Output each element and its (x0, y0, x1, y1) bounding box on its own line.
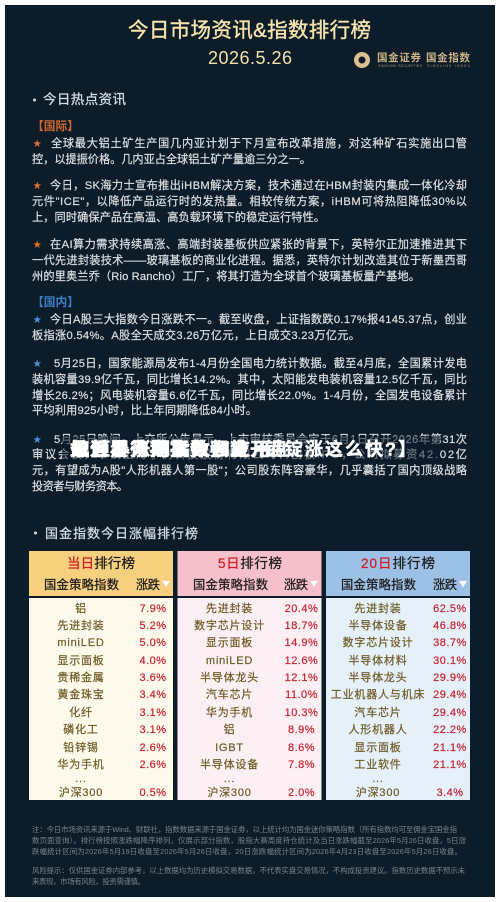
news text: domestic (32, 312, 468, 493)
news text: domestic: ★ (33, 434, 42, 444)
caption overlay band (62, 436, 440, 462)
returns: 12.6% (285, 655, 318, 667)
returns: 14.9% (285, 637, 318, 649)
column headers: 涨跌 (136, 577, 160, 592)
news text: international: 控，以提振价格。几内亚占全球铝土矿产量逾三分之一。 (32, 152, 311, 166)
news text: international: 在AI算力需求持续高涨、高端封装基板供应紧张的背景下，英特尔正加速推进其下 (50, 237, 467, 251)
returns: 0.5% (139, 787, 167, 799)
returns (139, 603, 167, 799)
returns: 29.4% (433, 689, 467, 701)
news text: domestic: 板指涨0.54%。A股全天成交3.26万亿元，上日成交3.23万亿元。 (32, 328, 360, 342)
footnote and risk disclosure: 数页面查询）。排行榜按照涨跌幅降序排列，仅展示部分指数，股指大赛周度持仓统计及当日涨跌幅截至2026年5月26日收盘，5日涨 (32, 836, 467, 845)
index names: 显示面板 (354, 740, 402, 754)
news text: international: ★ (33, 240, 42, 250)
overlapping video captions: 如何看待期指数强势开盘 (70, 438, 290, 460)
news text: domestic: 5月25日晚间，上交所公告显示，上市审核委员会定于6月1日召开2026年第31次 (54, 432, 467, 446)
footnote and risk disclosure: 跌幅统计区间为2026年5月19日收盘至2026年5月26日收盘，20日涨跌幅统计区间为2026年4月23日收盘至2026年5月26日收盘。 (32, 847, 462, 856)
column headers: 国金策略指数 (193, 577, 268, 592)
heading: index ranking: 国金指数今日涨幅排行榜 (45, 526, 198, 541)
news text: domestic: 增长26.2%；风电装机容量6.6亿千瓦，同比增长22.0%。1-4月份，全国发电设备累计 (32, 388, 467, 402)
returns: 2.6% (139, 759, 167, 771)
returns: 29.4% (433, 707, 467, 719)
returns: 2.6% (139, 742, 167, 754)
index names: ... (372, 773, 384, 785)
title: 今日市场资讯&指数排行榜 (128, 19, 371, 42)
news text: domestic: 平均利用925小时，比上年同期降低84小时。 (32, 403, 257, 417)
column headers: 涨跌 (284, 577, 308, 592)
news text: domestic: ★ (33, 314, 42, 324)
index names: 先进封装 (206, 601, 253, 615)
index names: 工业机器人与机床 (331, 687, 425, 701)
news text: domestic: 元，有望成为A股"人形机器人第一股"；公司股东阵容豪华，几乎囊括了国内顶级战略 (32, 463, 468, 477)
index names: 半导体龙头 (200, 670, 259, 684)
column headers: 国金策略指数 (44, 577, 119, 592)
returns: 3.4% (436, 787, 464, 799)
returns: 4.0% (139, 655, 167, 667)
news text: international: ★ (33, 138, 42, 148)
index names: IGBT (215, 742, 244, 754)
news text: international (32, 136, 467, 283)
news text: domestic: 审议会议，审议上海宇树科技股份有限公司科创板IPO，公司拟募资42.02亿 (32, 447, 467, 461)
index names: 数字芯片设计 (343, 635, 413, 649)
index names: 汽车芯片 (354, 705, 402, 719)
returns: 30.1% (433, 655, 467, 667)
returns: 3.6% (139, 672, 167, 684)
panel title: 当日排行榜 (67, 555, 135, 571)
overlapping video captions: 铝锭涨这么快?】 (265, 438, 418, 460)
logo: Sinolink: SINOLINK SECURITIES (378, 64, 423, 68)
news text: international: 州的里奥兰乔（Rio Rancho）工厂，将其打造为全球首个玻璃基板量产基地。 (32, 269, 420, 283)
logo: Sinolink: 国金指数 (426, 51, 470, 64)
returns: 2.0% (288, 787, 315, 799)
returns (433, 603, 467, 799)
returns: 11.0% (285, 689, 318, 701)
returns: 29.9% (433, 672, 467, 684)
news text: international: ★ (33, 180, 42, 190)
index names: 铅锌锡 (63, 740, 99, 754)
index names: 华为手机 (206, 705, 253, 719)
news text: domestic: 5月25日，国家能源局发布1-4月份全国电力统计数据。截至4月底，全国累计发电 (54, 356, 467, 370)
tag: domestic: 【国内】 (32, 295, 79, 309)
overlapping video captions (70, 438, 418, 460)
returns: 10.3% (285, 707, 318, 719)
index names: 汽车芯片 (206, 687, 253, 701)
returns: 3.1% (139, 724, 167, 736)
index names: miniLED (206, 655, 253, 667)
logo: Sinolink (354, 51, 471, 68)
tag: international: 【国际】 (32, 119, 79, 133)
index names (331, 601, 425, 799)
panel title: 5日排行榜 (218, 555, 282, 571)
date: 2026.5.26 (208, 48, 292, 68)
index names: 半导体设备 (200, 757, 259, 771)
news text: international: 上，同时确保产品在高温、高负载环境下的稳定运行特性。 (32, 210, 325, 224)
returns: 7.8% (288, 759, 315, 771)
logo: Sinolink: SINOLINK INDEX (427, 64, 471, 68)
footnote and risk disclosure: 风险提示：仅供国金证券内部参考，以上数据均为历史模拟交易数据，不代表实盘交易情况，不构成投资建议。指数历史数据不预示未 (32, 866, 466, 875)
panel: 5-day ranking (178, 551, 322, 800)
footnote and risk disclosure: 注：今日市场资讯来源于Wind、财联社，指数数据来源于国金证券，以上统计均为国金迷你策略指数（所有指数均可至佣金宝国金指 (32, 825, 458, 834)
news text: domestic: ★ (33, 358, 42, 368)
returns: 62.5% (433, 603, 467, 615)
panel title: 20日排行榜 (361, 555, 435, 571)
index names: 沪深300 (356, 785, 400, 799)
index names: 半导体设备 (348, 618, 408, 632)
index names: 显示面板 (57, 653, 105, 667)
logo: Sinolink: 国金证券 (377, 51, 422, 64)
news text: domestic: 投资者与财务资本。 (32, 479, 128, 493)
footnote and risk disclosure (32, 825, 467, 886)
index names: 显示面板 (206, 635, 253, 649)
panel: 20-day ranking (326, 551, 470, 800)
overlapping video captions: 鼎恒暴涨期指数和应用 (72, 438, 272, 460)
column headers (44, 577, 170, 592)
returns: 20.4% (285, 603, 318, 615)
index names: 数字芯片设计 (194, 618, 265, 632)
index names (194, 601, 265, 799)
column headers: 国金策略指数 (341, 577, 416, 592)
column headers: 涨跌 (433, 577, 457, 592)
returns: 12.1% (285, 672, 318, 684)
index names: ... (75, 773, 87, 785)
returns (285, 603, 318, 799)
index names: 半导体龙头 (348, 670, 408, 684)
footnote and risk disclosure: 来表现，市场有风险，投资需谨慎。 (32, 877, 145, 886)
returns: 5.0% (139, 637, 167, 649)
news text: domestic: 装机容量39.9亿千瓦，同比增长14.2%。其中，太阳能发电装机容量12.5亿千瓦，同比 (32, 372, 467, 386)
returns: 3.1% (139, 707, 167, 719)
returns: 21.1% (433, 759, 467, 771)
index names: 铝 (224, 722, 235, 736)
index names: 黄金珠宝 (57, 687, 105, 701)
returns: 46.8% (433, 620, 467, 632)
heading: today's hot news: 今日热点资讯 (43, 92, 126, 107)
index names: miniLED (57, 637, 105, 649)
returns: 8.9% (288, 724, 315, 736)
index names: 铝 (75, 601, 87, 615)
index names: 半导体材料 (348, 653, 408, 667)
column headers (193, 577, 318, 592)
returns: 22.2% (433, 724, 467, 736)
index names: 化纤 (69, 705, 93, 719)
news text: international: 一代先进封装技术——玻璃基板的商业化进程。据悉，英特尔计划改造其位于新墨西哥 (32, 253, 467, 267)
index names: 先进封装 (354, 601, 402, 615)
panel: daily ranking (29, 551, 173, 800)
news text: domestic: 今日A股三大指数今日涨跌不一。截至收盘，上证指数跌0.17%报4145.37点，创业 (50, 312, 467, 326)
returns: 8.6% (288, 742, 315, 754)
index names: 先进封装 (57, 618, 105, 632)
column headers (341, 577, 467, 592)
returns: 7.9% (139, 603, 167, 615)
returns: 18.7% (285, 620, 318, 632)
overlapping video captions: 最近黑天鹅事件频发 (70, 438, 250, 460)
index names: 沪深300 (207, 785, 252, 799)
returns: 5.2% (139, 620, 167, 632)
index names: ... (224, 773, 235, 785)
news text: international: 今日，SK海力士宣布推出iHBM解决方案，技术通过在HBM封装内集成一体化冷却 (50, 178, 467, 192)
returns: 21.1% (433, 742, 467, 754)
index names: 磷化工 (63, 722, 99, 736)
news text: international: 元件"ICE"，以降低产品运行时的发热量。相较传统方案，iHBM可将热阻降低30%以 (32, 194, 467, 208)
index names: 工业软件 (354, 757, 402, 771)
index names (57, 601, 105, 799)
news text: international: 全球最大铝土矿生产国几内亚计划于下月宣布改革措施，对这种矿石实施出口管 (51, 136, 467, 150)
index names: 人形机器人 (348, 722, 408, 736)
returns: 3.4% (139, 689, 167, 701)
index names: 华为手机 (57, 757, 105, 771)
index names: 沪深300 (59, 785, 103, 799)
index names: 贵稀金属 (57, 670, 105, 684)
returns: 38.7% (433, 637, 467, 649)
